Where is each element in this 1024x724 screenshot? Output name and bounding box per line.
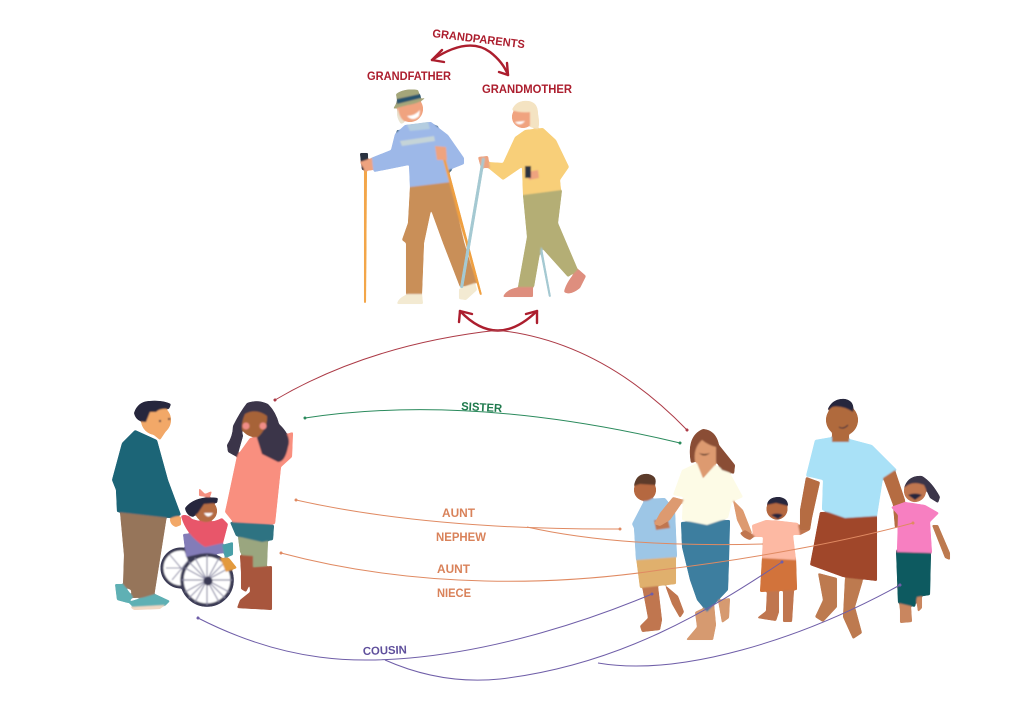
figure: grandmother (460, 101, 586, 297)
figure: grandfather (360, 90, 482, 304)
arrow: aunt to niece (281, 523, 913, 581)
label: aunt second: AUNT (437, 564, 470, 576)
label: niece: NIECE (437, 588, 471, 600)
arrow: cousin to small boy (385, 562, 782, 680)
label: aunt: AUNT (442, 508, 475, 520)
figure: girl in pink shirt (891, 476, 950, 623)
figure: child in wheelchair (162, 488, 237, 605)
figure: mother in cream shirt (654, 429, 752, 640)
arrow: cousin to girl (598, 585, 900, 666)
arrow: grandparents to mother (495, 330, 687, 430)
figure: father in blue t-shirt (800, 399, 907, 639)
arrow: nephew line (527, 527, 763, 545)
label: grandmother: GRANDMOTHER (482, 84, 573, 96)
figure: father in teal sweater (112, 401, 181, 610)
arrow: grandparents to aunt (275, 330, 499, 400)
label: grandfather: GRANDFATHER (367, 71, 452, 83)
arrow: grandparents to parents (459, 311, 537, 330)
arrow: aunt to nephew (296, 500, 620, 529)
label: cousin: COUSIN (363, 644, 407, 658)
label: nephew: NEPHEW (436, 532, 486, 544)
arrow: grandparents link (432, 46, 508, 75)
arrow: sister link (305, 410, 680, 443)
figure: boy in blue shirt (632, 474, 684, 632)
figure: small boy in pink shirt (740, 497, 810, 622)
label: sister: SISTER (461, 401, 503, 415)
arrow: cousin to boy (198, 594, 652, 660)
label: grandparents: GRANDPARENTS (432, 28, 526, 51)
figure: mother in salmon coat (225, 401, 293, 610)
